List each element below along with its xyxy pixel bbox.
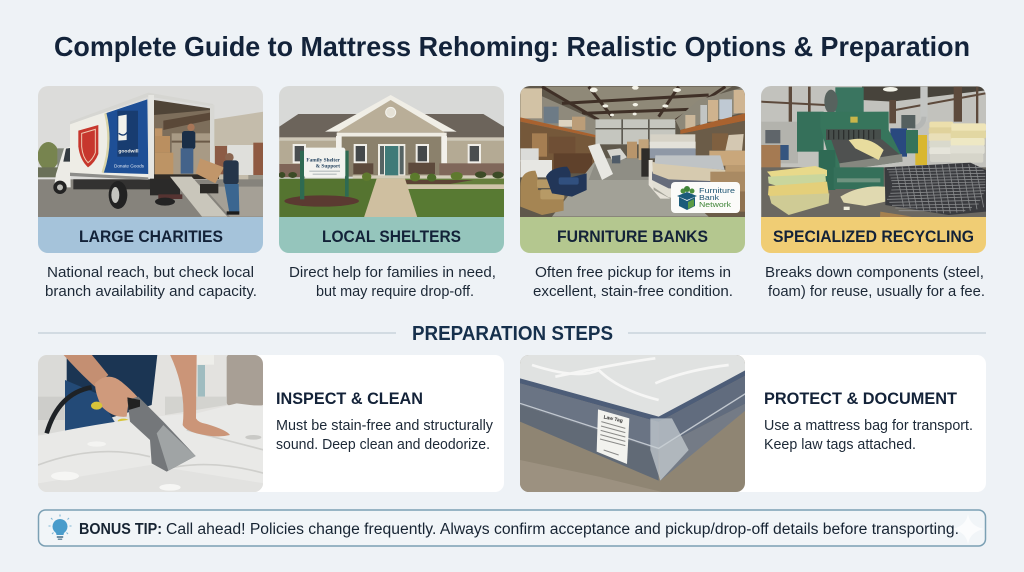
photo: bagged mattress with law tag: Law Tag: [603, 414, 623, 424]
description: specialized recycling: [765, 264, 985, 300]
text: bonus tip: BONUS TIP:: [79, 521, 162, 538]
text: protect and document: Use a mattress bag for transport.: [764, 417, 973, 434]
label band: furniture banks: [520, 217, 745, 253]
heading: inspect and clean: INSPECT & CLEAN: [276, 389, 423, 408]
panel: local shelters: [277, 85, 507, 300]
icon: light bulb: [48, 514, 72, 540]
text: protect and document: Keep law tags attached.: [764, 436, 916, 453]
description: large charities: branch availability and capacity.: [45, 283, 257, 300]
description: furniture banks: [533, 264, 733, 300]
title: Complete Guide to Mattress Rehoming: Realistic Options & Preparation: [54, 31, 970, 62]
panel: specialized recycling: [759, 85, 989, 300]
logo: Furniture Bank Network: Bank: [699, 193, 719, 202]
description: specialized recycling: Breaks down components (steel,: [765, 264, 984, 281]
text: protect and document: [764, 417, 973, 453]
label text: large charities: LARGE CHARITIES: [79, 227, 223, 246]
callout: bonus tip: [38, 510, 986, 546]
panel: large charities: [37, 85, 267, 300]
photo: shelter house with sign: & Support: [316, 164, 340, 170]
description: local shelters: [289, 264, 496, 300]
panel: furniture banks: [519, 85, 749, 300]
description: furniture banks: Often free pickup for items in: [535, 264, 731, 281]
label band: specialized recycling: [761, 217, 986, 253]
photo: donation truck being loaded: [37, 85, 267, 218]
label text: specialized recycling: SPECIALIZED RECYCLING: [773, 227, 974, 246]
photo: donation truck being loaded: Donate Goods: [114, 163, 145, 168]
description: furniture banks: excellent, stain-free condition.: [533, 283, 733, 300]
heading: preparation steps: PREPARATION STEPS: [412, 323, 613, 345]
heading: protect and document: PROTECT & DOCUMENT: [764, 389, 958, 408]
panel: inspect and clean: [37, 353, 504, 493]
label text: local shelters: LOCAL SHELTERS: [322, 227, 461, 246]
callout: bonus tip: Call ahead! Policies change frequently. Always confirm acceptance and pickup/drop-off details before transporting.: [166, 521, 959, 538]
logo: Furniture Bank Network: Network: [699, 200, 731, 209]
label band: large charities: [38, 217, 263, 253]
description: local shelters: but may require drop-off.: [316, 283, 474, 300]
logo: Furniture Bank Network: [671, 182, 740, 213]
text: inspect and clean: sound. Deep clean and deodorize.: [276, 436, 490, 453]
photo: furniture warehouse: [519, 85, 749, 218]
label text: furniture banks: FURNITURE BANKS: [557, 227, 708, 246]
photo: recycling machine, foam and springs: [759, 85, 989, 218]
text: inspect and clean: Must be stain-free and structurally: [276, 417, 493, 434]
panel: protect and document: [519, 353, 986, 493]
text: inspect and clean: [276, 417, 493, 453]
photo: bagged mattress with law tag: [519, 353, 749, 493]
label band: local shelters: [279, 217, 504, 253]
photo: donation truck being loaded: goodwill: [118, 149, 139, 155]
description: specialized recycling: foam) for reuse, usually for a fee.: [768, 283, 985, 300]
photo: shelter house with sign: Family Shelter: [306, 157, 341, 163]
logo: Furniture Bank Network: Furniture: [699, 186, 735, 195]
photo: shelter house with sign: [277, 85, 507, 218]
description: large charities: [45, 264, 257, 300]
photo: cleaning a mattress: [37, 353, 267, 493]
description: local shelters: Direct help for families in need,: [289, 264, 496, 281]
description: large charities: National reach, but check local: [47, 264, 254, 281]
